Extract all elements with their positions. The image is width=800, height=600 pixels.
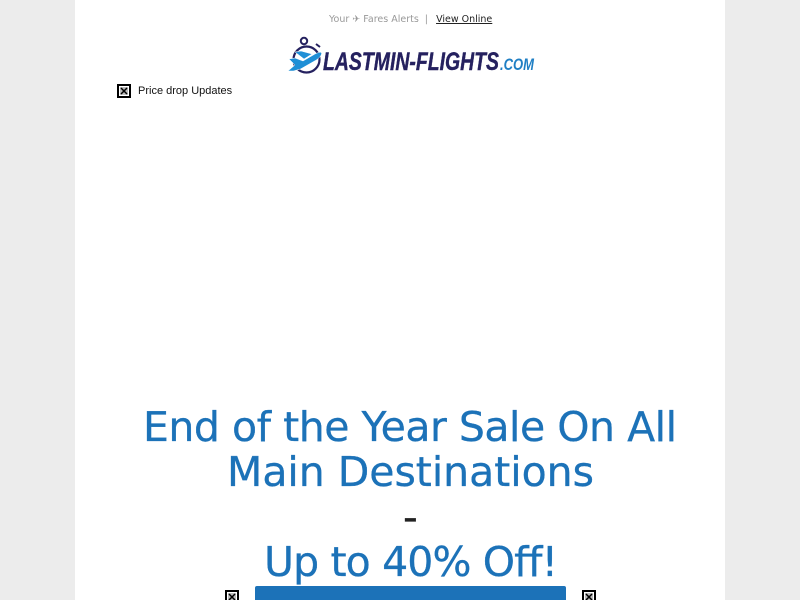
headline: End of the Year Sale On All bbox=[143, 403, 677, 451]
alt text: Price drop Updates bbox=[138, 85, 232, 97]
headline: - bbox=[403, 493, 418, 541]
icon: stopwatch with plane bbox=[288, 38, 322, 72]
broken image icon with alt text bbox=[117, 84, 232, 98]
headline bbox=[143, 403, 677, 586]
preheader text: Your ✈ Fares Alerts | View Online bbox=[329, 14, 492, 25]
call to action button bbox=[255, 586, 566, 600]
logo bbox=[288, 36, 535, 76]
right broken image icon bbox=[582, 590, 596, 600]
headline: Main Destinations bbox=[227, 448, 594, 496]
left broken image icon bbox=[225, 590, 239, 600]
icon: broken image bbox=[117, 84, 131, 98]
headline: Up to 40% Off! bbox=[264, 538, 558, 586]
